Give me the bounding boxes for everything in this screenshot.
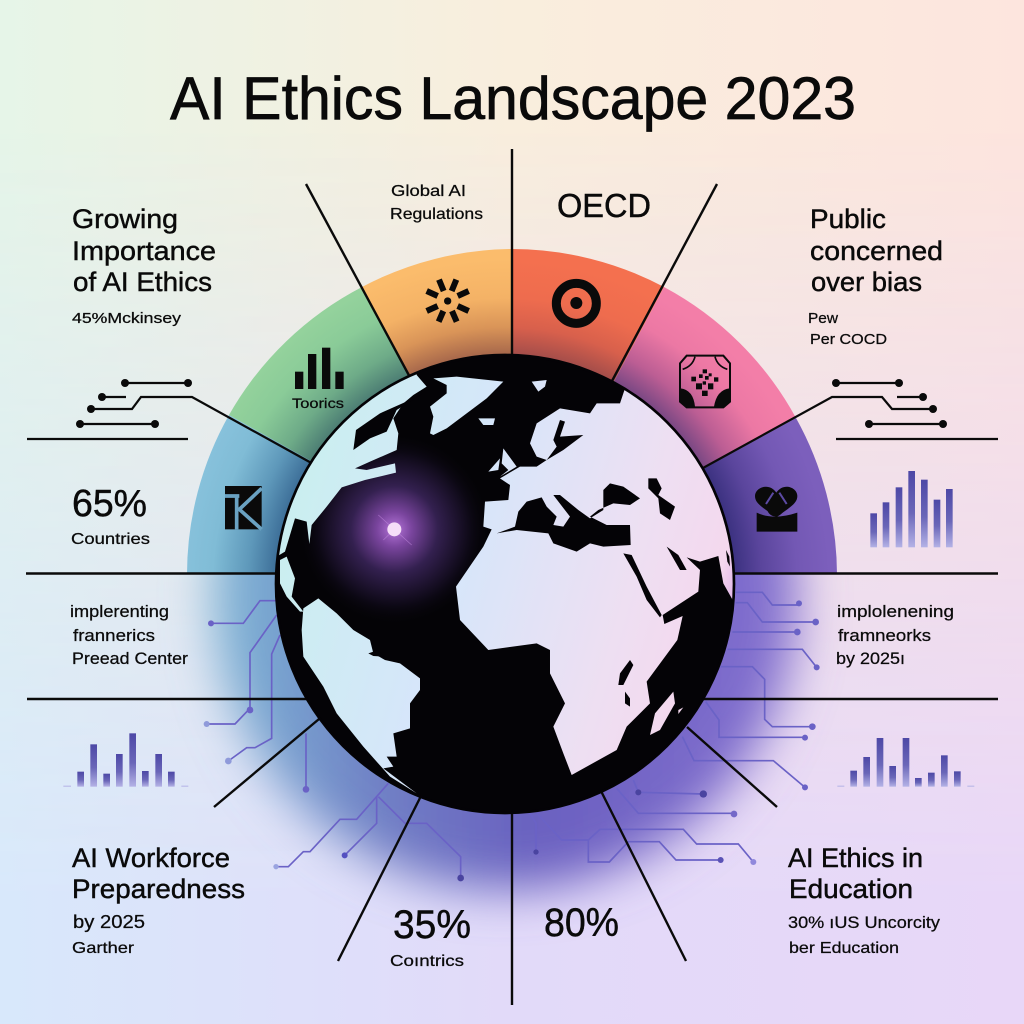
text block: implementing right: by 2025ı: [836, 649, 905, 668]
text block: Growing Importance: Importance: [72, 236, 216, 266]
circuit lines: upper right: [703, 379, 998, 468]
text block: Growing Importance: of AI Ethics: [73, 267, 212, 297]
landmasses: [279, 374, 733, 794]
text block: OECD: OECD: [557, 187, 651, 224]
globe: [274, 354, 736, 814]
star: [378, 515, 412, 545]
text block: AI Workforce Preparedness: by 2025: [73, 912, 145, 932]
stat: 80%: 80%: [544, 901, 619, 945]
icon: heart and base: [755, 487, 797, 532]
icon: target: [556, 283, 596, 323]
ring segment: red: [512, 249, 664, 574]
text block: implementing right: [836, 602, 954, 668]
text block: AI Ethics in Education: 30% ıUS Uncorcity: [788, 913, 941, 932]
stat: 65% countries: 65%: [72, 483, 147, 525]
stat: 65% countries: Countries: [71, 531, 150, 548]
stat: 35% countries: 35%: [393, 903, 471, 947]
text block: implementing right: framneorks: [838, 626, 931, 645]
circuit lines: upper left: [27, 379, 315, 465]
ring segment: pink: [512, 287, 796, 574]
text block: implementing left: frannerics: [73, 626, 155, 645]
text block: Growing Importance: Growing: [72, 204, 178, 234]
text block: Global AI Regulations: [390, 183, 483, 223]
purple glow under globe: [182, 574, 829, 924]
text block: implementing left: Preead Center: [72, 649, 188, 668]
text block: AI Workforce Preparedness: Garther: [72, 940, 135, 957]
star glow on ocean: [312, 448, 476, 612]
bar chart: lower left: [63, 733, 188, 787]
ring segment: blue: [187, 415, 512, 574]
text block: Public concerned: [808, 204, 943, 348]
ring segment: purple: [512, 418, 837, 574]
text block: Public concerned: over bias: [811, 267, 922, 297]
text block: Public concerned: Public: [810, 204, 886, 234]
text block: AI Ethics in Education: Education: [789, 874, 913, 904]
bar chart: upper right: [870, 471, 953, 547]
seas and dark islands: [353, 393, 730, 707]
icon: bars with label: [292, 348, 344, 411]
text block: implementing left: implerenting: [70, 602, 169, 621]
text block: AI Workforce Preparedness: Preparedness: [72, 874, 245, 904]
ring segment: green: [229, 287, 512, 574]
text block: Public concerned: concerned: [810, 236, 943, 266]
stat: 35% countries: [390, 903, 471, 970]
text block: Global AI Regulations: Regulations: [390, 206, 483, 223]
text block: Global AI Regulations: Global AI: [391, 183, 466, 200]
stat: 35% countries: Coıntrics: [390, 953, 464, 970]
text block: AI Ethics in Education: ber Education: [789, 940, 899, 957]
text block: implementing left: [70, 602, 188, 668]
text block: implementing right: implolenening: [837, 602, 954, 621]
text block: Growing Importance: [72, 204, 216, 327]
icon: K logo: [225, 486, 262, 529]
icon: sunburst: [427, 280, 469, 322]
text block: Public concerned: Per COCD: [810, 331, 887, 348]
text block: AI Ethics in Education: [788, 843, 941, 957]
stat: 65% countries: [71, 483, 150, 548]
text block: AI Ethics in Education: AI Ethics in: [788, 843, 923, 873]
circuit traces: bottom: [378, 780, 756, 881]
text block: AI Workforce Preparedness: [72, 843, 245, 957]
radial and horizontal divider lines: [26, 149, 998, 1005]
circuit traces: lower left: [204, 601, 388, 869]
text block: Growing Importance: 45%Mckinsey: [72, 310, 182, 327]
ring segment: orange: [362, 249, 512, 574]
title: AI Ethics Landscape 2023: [170, 65, 856, 132]
icon: chip: [680, 356, 730, 407]
text block: Public concerned: Pew: [808, 310, 838, 327]
bar chart: lower right: [837, 738, 974, 787]
text block: AI Workforce Preparedness: AI Workforce: [72, 843, 230, 873]
circuit traces: lower right: [682, 592, 820, 790]
icon: bars with label: Toorics: [292, 395, 344, 411]
